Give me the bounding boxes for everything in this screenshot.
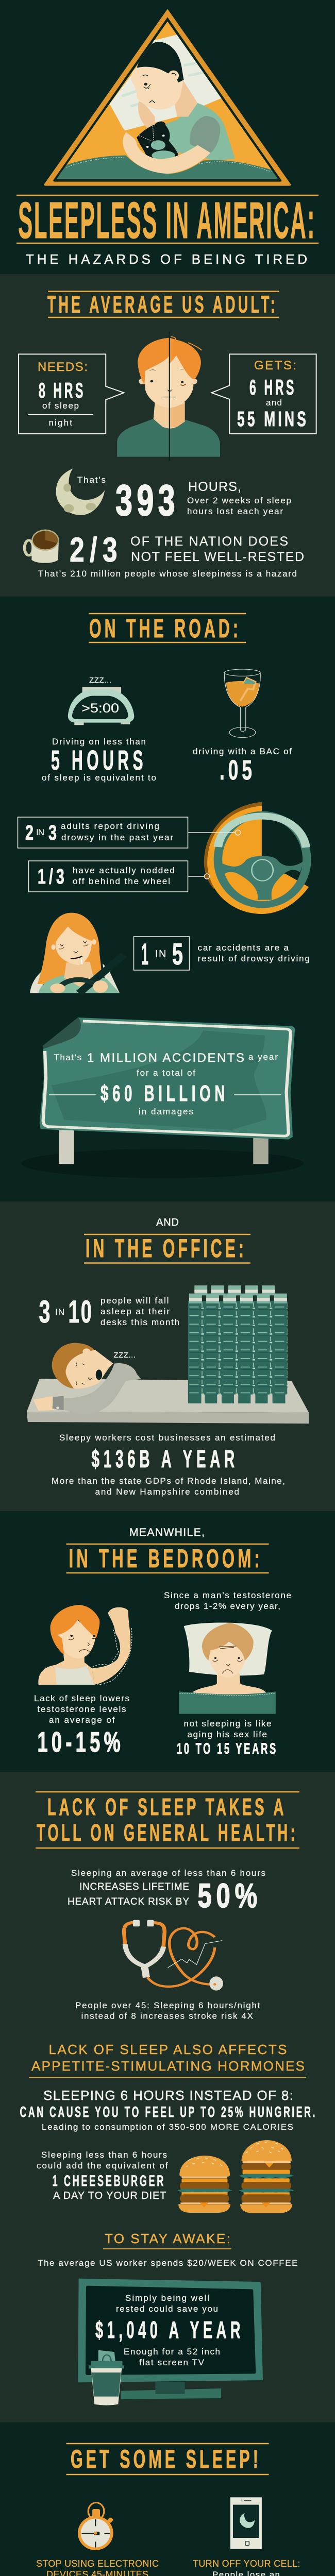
tip: stop using electronics xyxy=(36,2558,159,2576)
callout: 1 in 5: result of drowsy driving xyxy=(198,954,310,963)
illustration: highway sign: $60 BILLION xyxy=(100,1081,229,1106)
stat: 10 to 15 years xyxy=(177,1719,278,1757)
illustration: highway sign: That’s xyxy=(54,1053,81,1062)
illustration: highway sign: in damages xyxy=(139,1107,193,1116)
panel: general health xyxy=(0,1772,335,2422)
heading: appetite hormones: LACK OF SLEEP ALSO AFFECTS xyxy=(48,2042,287,2057)
callout: needs: 8 HRS xyxy=(39,378,86,402)
callout: gets: GETS: xyxy=(254,359,296,372)
illustration: half rested half tired man xyxy=(117,332,220,461)
illustration: flat screen tv: rested could save you xyxy=(116,2304,218,2314)
stat: two thirds not well rested: NOT FEEL WELL-RESTED xyxy=(131,550,304,564)
callout: 2 in 3: 3 xyxy=(48,821,57,844)
callout: 1/3 xyxy=(29,861,209,892)
illustration: woman asleep at the wheel xyxy=(30,913,124,993)
callout: needs xyxy=(19,354,124,434)
stat: driving on less than 5 hours: 5 HOURS xyxy=(51,745,147,776)
callout: 1/3: off behind the wheel xyxy=(73,876,170,886)
icon: crescent moon xyxy=(56,468,105,515)
label: meanwhile: MEANWHILE, xyxy=(129,1527,205,1538)
text: since a man's testosterone xyxy=(164,1590,291,1611)
stat: 3 in 10: people will fall xyxy=(100,1296,169,1306)
callout: 2 in 3: IN xyxy=(36,827,44,837)
callout: 1 in 5: car accidents are a xyxy=(198,943,289,953)
stat: 10 to 15 years: not sleeping is like xyxy=(183,1719,271,1728)
panel: hero xyxy=(16,9,319,264)
callout: 1/3: 1/3 xyxy=(38,865,68,888)
text: stroke risk: People over 45: Sleeping 6 hours/night xyxy=(75,2001,260,2010)
stat: 3 in 10: 10 xyxy=(68,1294,93,1329)
chart: steering wheel pie xyxy=(204,802,309,914)
stat: 10-15%: testosterone levels xyxy=(37,1704,126,1714)
icon: alarm clock xyxy=(68,676,134,725)
stat: 1 cheeseburger xyxy=(37,2150,168,2201)
illustration: flat screen tv: flat screen TV xyxy=(139,2358,205,2367)
heading: to stay awake: TO STAY AWAKE: xyxy=(105,2231,230,2246)
illustration: highway sign: 1 MILLION ACCIDENTS xyxy=(87,1051,244,1065)
icon: smartphone with moon xyxy=(230,2497,262,2549)
label: zzz: ZZZ... xyxy=(113,1351,136,1360)
stat: 3 in 10: IN xyxy=(55,1307,64,1317)
stat: 393 hours xyxy=(77,475,291,524)
illustration: highway sign xyxy=(21,1018,304,1178)
stat: 50% heart attack risk: HEART ATTACK RISK BY xyxy=(68,1896,189,1907)
stat: 1 cheeseburger: A DAY TO YOUR DIET xyxy=(53,2190,166,2201)
illustration: flat screen tv: Enough for a 52 inch xyxy=(124,2347,220,2357)
stat: two thirds not well rested: That’s 210 million people whose sleepiness is a hazard xyxy=(38,569,297,579)
stat: 3 in 10: asleep at their xyxy=(100,1307,170,1316)
stat: 10-15% xyxy=(34,1693,129,1758)
tip: turn off your cell: TURN OFF YOUR CELL: xyxy=(193,2558,300,2569)
stat: driving on less than 5 hours: Driving on less than xyxy=(52,737,146,747)
callout: 1 in 5: 1 xyxy=(141,938,148,971)
stat: BAC of .05: .05 xyxy=(220,755,256,786)
callout: 2 in 3 xyxy=(18,817,240,848)
icon: coffee mug xyxy=(25,530,59,563)
label: and: AND xyxy=(156,1217,179,1228)
stat: 10-15%: 10-15% xyxy=(37,1726,124,1758)
callout: 1 in 5 xyxy=(134,937,310,971)
illustration: aged man in bed xyxy=(179,1623,276,1714)
stat: $136B a year xyxy=(52,1433,285,1497)
subtitle: THE HAZARDS OF BEING TIRED xyxy=(26,251,307,267)
stat: 50% heart attack risk: Sleeping an average of less than 6 hours xyxy=(71,1868,265,1878)
stat: driving on less than 5 hours: of sleep is equivalent to xyxy=(42,773,156,783)
stat: 393 hours: hours lost each year xyxy=(187,506,283,516)
stat: $136B a year: Sleepy workers cost businesses an estimated xyxy=(59,1433,275,1443)
icon: alarm clock: >5:00 xyxy=(81,701,119,716)
illustration: flat screen tv xyxy=(78,2279,263,2399)
illustration: flat screen tv: Simply being well xyxy=(125,2293,209,2303)
stat: 50% heart attack risk: 50% xyxy=(198,1876,262,1914)
callout: 2 in 3: drowsy in the past year xyxy=(61,833,173,842)
callout: needs: of sleep xyxy=(42,401,79,411)
stat: 50% heart attack risk xyxy=(68,1868,265,1914)
stat: 393 hours: That’s xyxy=(77,475,106,485)
stat: 393 hours: 393 xyxy=(115,476,179,524)
panel: the average US adult xyxy=(0,274,335,597)
callout: 1 in 5: IN xyxy=(155,948,166,960)
callout: gets xyxy=(211,354,316,434)
stat: 50% heart attack risk: INCREASES LIFETIME xyxy=(79,1882,189,1892)
stat: 10 to 15 years: aging his sex life xyxy=(188,1730,267,1739)
tip: stop using electronics: STOP USING ELECTRONIC xyxy=(36,2558,159,2569)
panel: get some sleep xyxy=(0,2422,335,2576)
text: stroke risk xyxy=(75,2001,260,2021)
stat: $136B a year: More than the state GDPs of Rhode Island, Maine, xyxy=(52,1476,285,1486)
callout: gets: and xyxy=(266,398,282,408)
heading: appetite hormones xyxy=(29,2042,306,2077)
text: since a man's testosterone: drops 1-2% every year, xyxy=(175,1601,280,1611)
heading: appetite hormones: APPETITE-STIMULATING HORMONES xyxy=(31,2058,305,2074)
icon: alarm clock: ZZZ... xyxy=(89,676,111,685)
stat: 25% hungrier: Leading to consumption of 350-500 MORE CALORIES xyxy=(42,2122,293,2132)
stat: 1 cheeseburger: 1 CHEESEBURGER xyxy=(53,2173,165,2190)
text: stroke risk: instead of 8 increases stroke risk 4X xyxy=(81,2011,253,2021)
illustration: worker asleep on desk beside money stacks xyxy=(27,1285,309,1423)
stat: two thirds not well rested: 2/3 xyxy=(70,531,123,569)
stat: $136B a year: and New Hampshire combined xyxy=(95,1487,239,1497)
panel: on the road xyxy=(0,597,335,1201)
icon: stethoscope xyxy=(124,1920,223,1991)
illustration: weak arm man xyxy=(38,1605,132,1685)
callout: 2 in 3: 2 xyxy=(25,821,34,844)
text: since a man's testosterone: Since a man’s testosterone xyxy=(164,1590,291,1600)
callout: 1/3: have actually nodded xyxy=(73,866,175,875)
hero illustration: sleepless boy in warning triangle xyxy=(44,9,291,186)
icon: stopwatch xyxy=(78,2503,114,2550)
stat: BAC of .05 xyxy=(193,747,292,786)
stat: 25% hungrier: SLEEPING 6 HOURS INSTEAD OF 8: xyxy=(43,2088,293,2103)
illustration: highway sign: a year xyxy=(248,1052,278,1062)
stat: 1 cheeseburger: Sleeping less than 6 hours xyxy=(41,2150,167,2160)
icon: coffee cup with money xyxy=(89,2350,124,2405)
heading: general health xyxy=(36,1792,299,1848)
panel: in the bedroom xyxy=(0,1511,335,1772)
stat: 10-15%: an average of xyxy=(49,1715,115,1725)
stat: driving on less than 5 hours xyxy=(42,737,156,783)
icon: wine glass with key xyxy=(224,669,260,738)
callout: needs: night xyxy=(48,418,72,428)
callout: 1 in 5: 5 xyxy=(172,938,183,971)
stat: 3 in 10: 3 xyxy=(39,1294,51,1329)
stat: two thirds not well rested xyxy=(38,531,304,579)
stat: 393 hours: HOURS, xyxy=(188,480,241,494)
stat: 3 in 10: desks this month xyxy=(100,1317,179,1327)
stat: BAC of .05: driving with a BAC of xyxy=(193,747,292,756)
icon: two burgers xyxy=(177,2140,294,2213)
stat: 25% hungrier xyxy=(20,2088,317,2132)
text: coffee spend: The average US worker spends $20/WEEK ON COFFEE xyxy=(38,2258,298,2268)
tip: turn off your cell xyxy=(193,2558,300,2576)
illustration: highway sign: for a total of xyxy=(137,1068,195,1078)
callout: 2 in 3: adults report driving xyxy=(61,821,159,831)
callout: needs: NEEDS: xyxy=(38,360,88,374)
panel: in the office xyxy=(0,1201,335,1511)
stat: two thirds not well rested: OF THE NATION DOES xyxy=(130,534,288,549)
stat: 3 in 10 xyxy=(39,1294,179,1329)
stat: 10-15%: Lack of sleep lowers xyxy=(34,1693,129,1703)
callout: gets: 6 HRS xyxy=(249,375,296,399)
stat: 1 cheeseburger: could add the equivalent of xyxy=(37,2161,168,2171)
stat: 393 hours: Over 2 weeks of sleep xyxy=(187,496,291,505)
